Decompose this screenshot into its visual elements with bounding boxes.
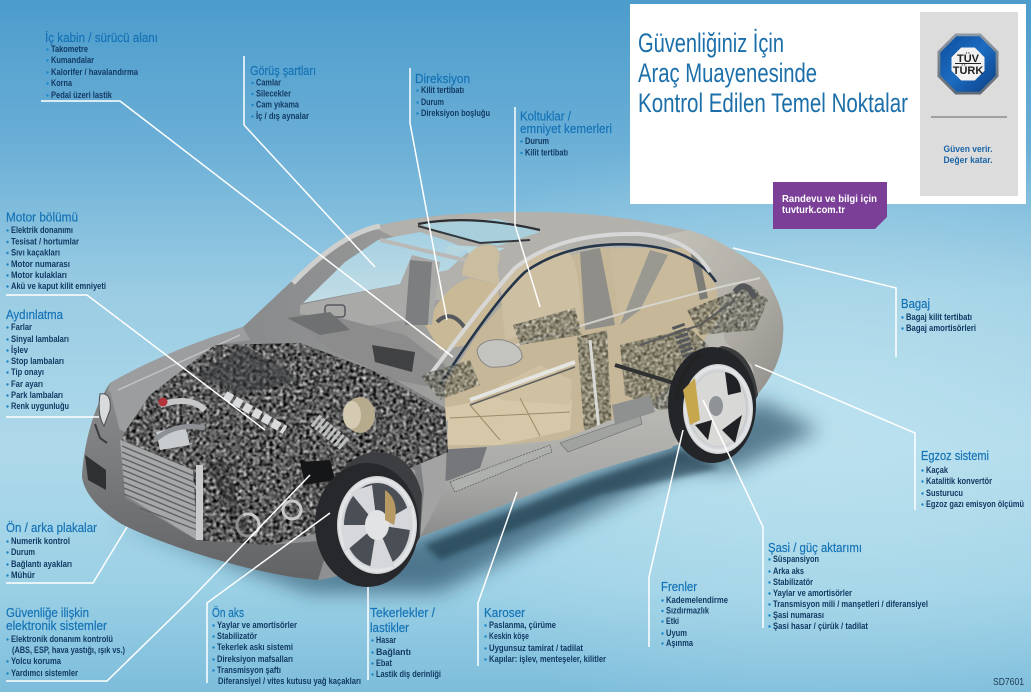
list <box>6 322 69 411</box>
heading: Tekerlekler / <box>370 605 435 620</box>
list: Far ayarı <box>11 379 43 389</box>
windshield and sunroof glass <box>293 219 540 303</box>
list: Durum <box>11 547 35 557</box>
heading: elektronik sistemler <box>6 618 108 633</box>
list: Renk uygunluğu <box>11 401 69 411</box>
list <box>661 595 728 648</box>
appointment callout: tuvturk.com.tr <box>782 204 845 216</box>
list: Ebat <box>376 658 392 668</box>
logo: TÜV TÜRK <box>938 34 998 94</box>
list: Bagaj amortisörleri <box>906 323 976 333</box>
door sill <box>420 395 682 537</box>
list: Motor numarası <box>11 259 70 269</box>
list: Diferansiyel / vites kutusu yağ kaçakları <box>218 676 361 686</box>
logo: TÜV TÜRK: TÜV <box>957 52 980 65</box>
list: Aşınma <box>666 638 694 648</box>
list: Elektronik donanım kontrolü <box>11 634 113 644</box>
title: Güvenliğiniz İçin <box>638 27 784 58</box>
list: İşlev <box>11 345 28 355</box>
list: Arka aks <box>773 566 804 576</box>
block: Görüş şartları <box>250 63 316 121</box>
block: Tekerlekler / lastikler <box>370 605 441 679</box>
list: Uyum <box>666 628 687 638</box>
list: Keskin köşe <box>489 631 529 641</box>
heading: Şasi / güç aktarımı <box>768 540 862 555</box>
heading: Karoser <box>484 605 526 620</box>
list: Motor kulakları <box>11 270 67 280</box>
list: Stabilizatör <box>773 577 813 587</box>
car shadow <box>110 400 820 592</box>
list: Etki <box>666 616 679 626</box>
list: Transmisyon şaftı <box>217 665 281 675</box>
list: Silecekler <box>256 88 291 98</box>
hood strip and front fender <box>100 327 448 537</box>
list: Park lambaları <box>11 390 63 400</box>
front bumper <box>82 390 330 580</box>
title: Araç Muayenesinde <box>638 58 817 88</box>
list: Yaylar ve amortisörler <box>217 620 297 630</box>
door panel and dashboard <box>287 255 447 390</box>
block: Direksiyon <box>415 71 490 118</box>
list: Stabilizatör <box>217 631 257 641</box>
list: Direksiyon boşluğu <box>421 108 490 118</box>
list <box>520 136 568 158</box>
heading: Egzoz sistemi <box>921 448 989 463</box>
logo: TÜV TÜRK: TÜRK <box>953 64 983 77</box>
rear interior with seats <box>443 248 725 452</box>
side mirror <box>477 340 522 367</box>
heading: Direksiyon <box>415 71 470 86</box>
heading: emniyet kemerleri <box>520 121 612 136</box>
list: Transmisyon mili / manşetleri / diferansiyel <box>773 599 928 609</box>
slogan: Güven verir. <box>944 144 992 155</box>
heading: Ön / arka plakalar <box>6 520 98 535</box>
chassis mechanics <box>420 285 768 430</box>
list <box>901 312 976 333</box>
header panel <box>630 4 1026 204</box>
list: Kumandalar <box>51 55 94 65</box>
block: Koltuklar <box>520 108 612 158</box>
list: Sıvı kaçakları <box>11 248 60 258</box>
title: Kontrol Edilen Temel Noktalar <box>638 88 908 118</box>
heading: lastikler <box>370 620 410 635</box>
block: İç kabin <box>45 30 158 100</box>
list: Bağlantı <box>376 647 411 657</box>
list: Kalorifer / havalandırma <box>51 67 139 77</box>
heading <box>370 605 435 635</box>
list: Tekerlek askı sistemi <box>217 642 293 652</box>
list: Stop lambaları <box>11 356 64 366</box>
list: Kapılar: işlev, menteşeler, kilitler <box>489 654 606 664</box>
car illustration <box>82 212 820 592</box>
list <box>6 634 125 678</box>
front wheel <box>315 452 422 587</box>
block: Bagaj <box>901 296 976 333</box>
list: Takometre <box>51 44 88 54</box>
list: Cam yıkama <box>256 100 300 110</box>
list: Durum <box>421 97 444 107</box>
list <box>6 225 106 291</box>
list: Şasi hasar / çürük / tadilat <box>773 621 868 631</box>
list: Paslanma, çürüme <box>489 620 556 630</box>
list: Kilit tertibatı <box>421 85 464 95</box>
list: Uygunsuz tamirat / tadilat <box>489 643 583 653</box>
roof panel <box>373 212 770 300</box>
list: Bagaj kilit tertibatı <box>906 312 972 322</box>
car body silhouette <box>82 212 783 580</box>
list: Lastik diş derinliği <box>376 669 441 679</box>
appointment callout: Randevu ve bilgi için <box>782 193 877 205</box>
list <box>484 620 606 664</box>
appointment callout <box>773 182 887 229</box>
leader lines <box>6 56 915 683</box>
list: Kaçak <box>926 465 949 475</box>
heading: Koltuklar / <box>520 108 571 124</box>
list: Akü ve kaput kilit emniyeti <box>11 281 106 291</box>
list: (ABS, ESP, hava yastığı, ışık vs.) <box>12 645 125 655</box>
slogan <box>944 144 992 166</box>
heading <box>6 605 108 633</box>
list: Direksiyon mafsalları <box>217 654 293 664</box>
heading: Güvenliğe ilişkin <box>6 605 89 620</box>
heading: Bagaj <box>901 296 930 311</box>
heading: Görüş şartları <box>250 63 316 78</box>
list <box>212 620 361 686</box>
list: Sinyal lambaları <box>11 334 69 344</box>
list <box>371 635 441 679</box>
block: Güvenliğe ilişkin elektronik sistemler <box>6 605 125 678</box>
door line and rear quarter panel <box>430 230 783 395</box>
title <box>638 27 908 118</box>
list: Şasi numarası <box>773 610 824 620</box>
list <box>46 44 139 100</box>
list: Bağlantı ayakları <box>11 559 72 569</box>
heading: Ön aks <box>212 605 244 620</box>
list <box>921 465 1024 509</box>
list: Yardımcı sistemler <box>11 668 78 678</box>
block: Ön aks <box>212 605 361 686</box>
list: Tip onayı <box>11 367 44 377</box>
document code: SD7601 <box>993 677 1024 688</box>
heading <box>520 108 612 136</box>
list: Sızdırmazlık <box>666 606 710 616</box>
rear wheel <box>668 346 758 463</box>
block: Frenler <box>661 579 728 648</box>
block: Aydınlatma <box>6 307 69 411</box>
list <box>768 554 928 631</box>
list: Kademelendirme <box>666 595 728 605</box>
radiator <box>120 440 203 540</box>
list: Susturucu <box>926 488 963 498</box>
block: Egzoz sistemi <box>921 448 1024 509</box>
list: Elektrik donanımı <box>11 225 73 235</box>
list: Yaylar ve amortisörler <box>773 588 852 598</box>
list: Korna <box>51 78 73 88</box>
heading: Motor bölümü <box>6 210 78 224</box>
drive shaft and suspension <box>470 286 755 440</box>
list: Camlar <box>256 78 281 88</box>
block: Motor bölümü <box>6 210 106 291</box>
list: Mühür <box>11 570 35 580</box>
list: Numerik kontrol <box>11 536 70 546</box>
heading: Aydınlatma <box>6 307 64 322</box>
list: Hasar <box>376 635 396 645</box>
front seat <box>425 245 500 350</box>
headlight and grille slot <box>85 394 110 490</box>
list: Katalitik konvertör <box>926 476 992 486</box>
list <box>251 78 309 121</box>
list: Kilit tertibatı <box>525 148 568 158</box>
list: Farlar <box>11 322 32 332</box>
block: Şasi / güç aktarımı <box>768 540 928 631</box>
block: Karoser <box>484 605 606 664</box>
list: Yolcu koruma <box>11 656 62 666</box>
list: Durum <box>525 136 549 146</box>
list: Pedal üzeri lastik <box>51 90 113 100</box>
heading: İç kabin / sürücü alanı <box>45 30 158 45</box>
list <box>416 85 490 118</box>
logo panel <box>920 12 1018 196</box>
block: Ön / arka plakalar <box>6 520 98 580</box>
engine bay <box>120 340 450 550</box>
heading: Frenler <box>661 579 698 594</box>
list <box>6 536 72 580</box>
slogan: Değer katar. <box>944 155 992 166</box>
list: Tesisat / hortumlar <box>11 236 79 246</box>
list: İç / dış aynalar <box>256 111 309 121</box>
list: Süspansiyon <box>773 554 819 564</box>
